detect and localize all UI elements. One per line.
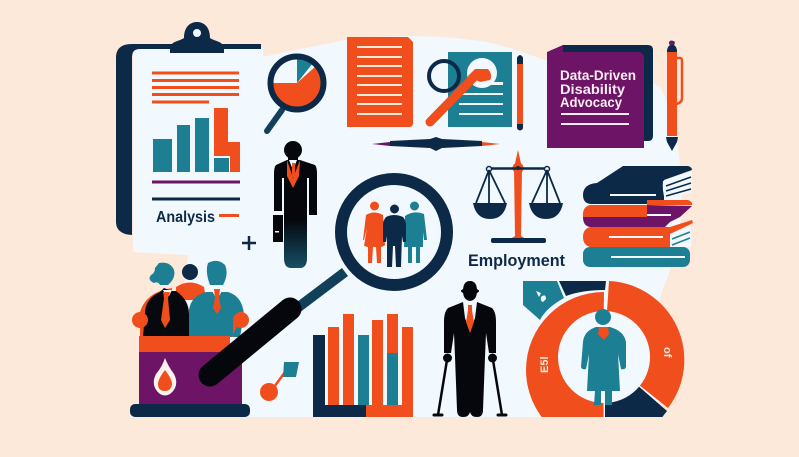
scales of justice <box>473 150 563 243</box>
small pencil <box>517 55 523 130</box>
segment: navy bottom <box>605 386 667 417</box>
segment: orange left <box>526 292 604 417</box>
teal document with magnifier <box>429 52 512 127</box>
large magnifying glass with people <box>292 179 447 312</box>
large orange pen <box>666 40 682 151</box>
small node icon <box>260 362 299 401</box>
paper text lines <box>152 72 239 104</box>
podium arms <box>132 312 148 328</box>
navy pointer <box>372 137 500 151</box>
book: navy <box>583 166 692 204</box>
book title <box>560 68 636 110</box>
segment: orange right <box>604 281 684 408</box>
donut label left: E5l <box>539 356 551 373</box>
person: orange <box>363 202 385 263</box>
small magnifier with pie chart <box>267 56 324 131</box>
book: orange and purple <box>583 200 692 217</box>
segment: navy top <box>559 281 606 296</box>
book title: Disability <box>560 82 626 97</box>
donut centre <box>558 311 650 403</box>
donut label right: of <box>661 347 673 358</box>
light background shape <box>130 36 682 417</box>
person in coat <box>581 309 626 405</box>
label: Employment: Employment <box>468 251 565 270</box>
book title: Advocacy <box>560 95 622 110</box>
seated figures <box>140 261 244 337</box>
person: navy <box>383 204 406 267</box>
book title: Data-Driven <box>560 68 636 83</box>
man with crutches <box>434 281 506 417</box>
label: Analysis: Analysis <box>156 209 215 226</box>
bar chart <box>313 314 413 417</box>
clipboard <box>116 22 261 235</box>
orange document <box>347 37 413 127</box>
donut chart with person <box>523 281 684 417</box>
stack of books <box>583 166 693 267</box>
clipboard bar chart <box>153 108 240 172</box>
icon: flame drop <box>154 358 176 396</box>
purple book <box>547 45 653 148</box>
podium with people <box>130 261 250 417</box>
book: orange <box>583 220 693 247</box>
book: teal <box>583 247 690 267</box>
segment: teal tag <box>523 281 564 320</box>
plus sign <box>242 236 256 250</box>
businessman with briefcase <box>273 141 317 268</box>
thick magnifier handle over podium <box>210 309 290 375</box>
person: teal <box>404 202 427 263</box>
